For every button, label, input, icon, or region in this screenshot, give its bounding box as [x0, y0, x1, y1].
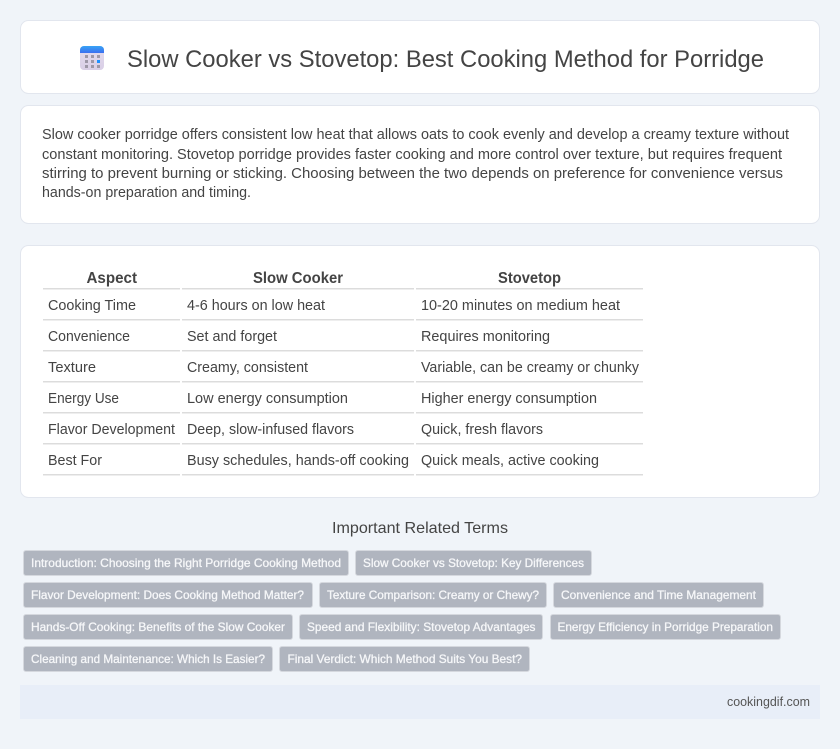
tag: flavor development — [24, 582, 312, 608]
tag: speed and flexibility — [300, 614, 542, 640]
footer source text: cookingdif.com — [727, 694, 810, 709]
footer — [20, 685, 820, 719]
table row: best for — [43, 453, 643, 476]
table header row — [43, 270, 643, 290]
text block: introduction paragraph: constant monitoring. Stovetop porridge provides faster cooking and more control over texture, but requires frequent — [42, 147, 782, 163]
panel: introduction — [20, 106, 820, 224]
tag: final verdict — [280, 646, 530, 672]
tag: cleaning and maintenance: Cleaning and Maintenance: Which Is Easier? — [31, 652, 265, 666]
tag: introduction — [24, 550, 348, 576]
panel: title header — [20, 20, 820, 94]
table row: best for: Quick meals, active cooking — [421, 453, 599, 469]
table header row: Stovetop — [498, 270, 561, 287]
panel: related term tags — [24, 550, 780, 672]
table row: texture — [43, 360, 643, 382]
table row: cooking time — [43, 298, 643, 320]
table row: texture: Texture — [48, 360, 96, 376]
tag: convenience — [554, 582, 764, 608]
heading: important related terms: Important Related Terms — [332, 520, 508, 537]
table row: flavor development: Flavor Development — [48, 422, 175, 438]
table row: cooking time: 4-6 hours on low heat — [187, 298, 325, 314]
table row: flavor development: Deep, slow-infused flavors — [187, 422, 354, 438]
tag: introduction: Introduction: Choosing the Right Porridge Cooking Method — [31, 556, 341, 570]
tag: hands-off cooking: Hands-Off Cooking: Benefits of the Slow Cooker — [31, 620, 285, 634]
table row: energy use — [43, 391, 643, 414]
text block: introduction paragraph — [42, 127, 789, 201]
tag: texture comparison — [320, 582, 546, 608]
table row: convenience: Set and forget — [187, 329, 277, 345]
tag: cleaning and maintenance — [24, 646, 272, 672]
table row: flavor development: Quick, fresh flavors — [421, 422, 543, 438]
table row: convenience — [43, 329, 643, 352]
table row: texture: Creamy, consistent — [187, 360, 308, 376]
table row: flavor development — [43, 422, 643, 444]
icon: calendar — [80, 46, 104, 70]
tag: convenience: Convenience and Time Management — [561, 588, 757, 602]
table row: energy use: Low energy consumption — [187, 391, 348, 407]
table header row: Aspect — [86, 270, 138, 287]
table row: energy use: Energy Use — [48, 391, 119, 407]
tag: final verdict: Final Verdict: Which Method Suits You Best? — [288, 652, 522, 666]
table row: best for: Busy schedules, hands-off cooking — [187, 453, 409, 469]
tag: energy efficiency: Energy Efficiency in Porridge Preparation — [558, 620, 773, 634]
table header row: Slow Cooker — [253, 270, 343, 287]
tag: key differences — [356, 550, 592, 576]
text block: introduction paragraph: Slow cooker porridge offers consistent low heat that allows oats to cook evenly and develop a creamy texture without — [42, 127, 789, 143]
tag: flavor development: Flavor Development: Does Cooking Method Matter? — [31, 588, 304, 602]
table row: best for: Best For — [48, 453, 102, 469]
text block: introduction paragraph: stirring to prevent burning or sticking. Choosing between the two depends on preference for convenience versus — [42, 166, 783, 182]
table row: texture: Variable, can be creamy or chunky — [421, 360, 640, 376]
tag: hands-off cooking — [24, 614, 292, 640]
table row: convenience: Requires monitoring — [421, 329, 550, 345]
tag: speed and flexibility: Speed and Flexibility: Stovetop Advantages — [307, 620, 536, 634]
table row: cooking time: Cooking Time — [48, 298, 136, 314]
panel: comparison table — [20, 246, 820, 498]
tag: energy efficiency — [550, 614, 780, 640]
title: Slow Cooker vs Stovetop: Best Cooking Method for Porridge — [127, 46, 764, 73]
text block: introduction paragraph: hands-on preparation and timing. — [42, 185, 251, 201]
table row: convenience: Convenience — [48, 329, 130, 345]
tag: texture comparison: Texture Comparison: Creamy or Chewy? — [327, 588, 539, 602]
tag: key differences: Slow Cooker vs Stovetop: Key Differences — [363, 556, 584, 570]
table row: energy use: Higher energy consumption — [421, 391, 597, 407]
table row: cooking time: 10-20 minutes on medium heat — [421, 298, 620, 314]
